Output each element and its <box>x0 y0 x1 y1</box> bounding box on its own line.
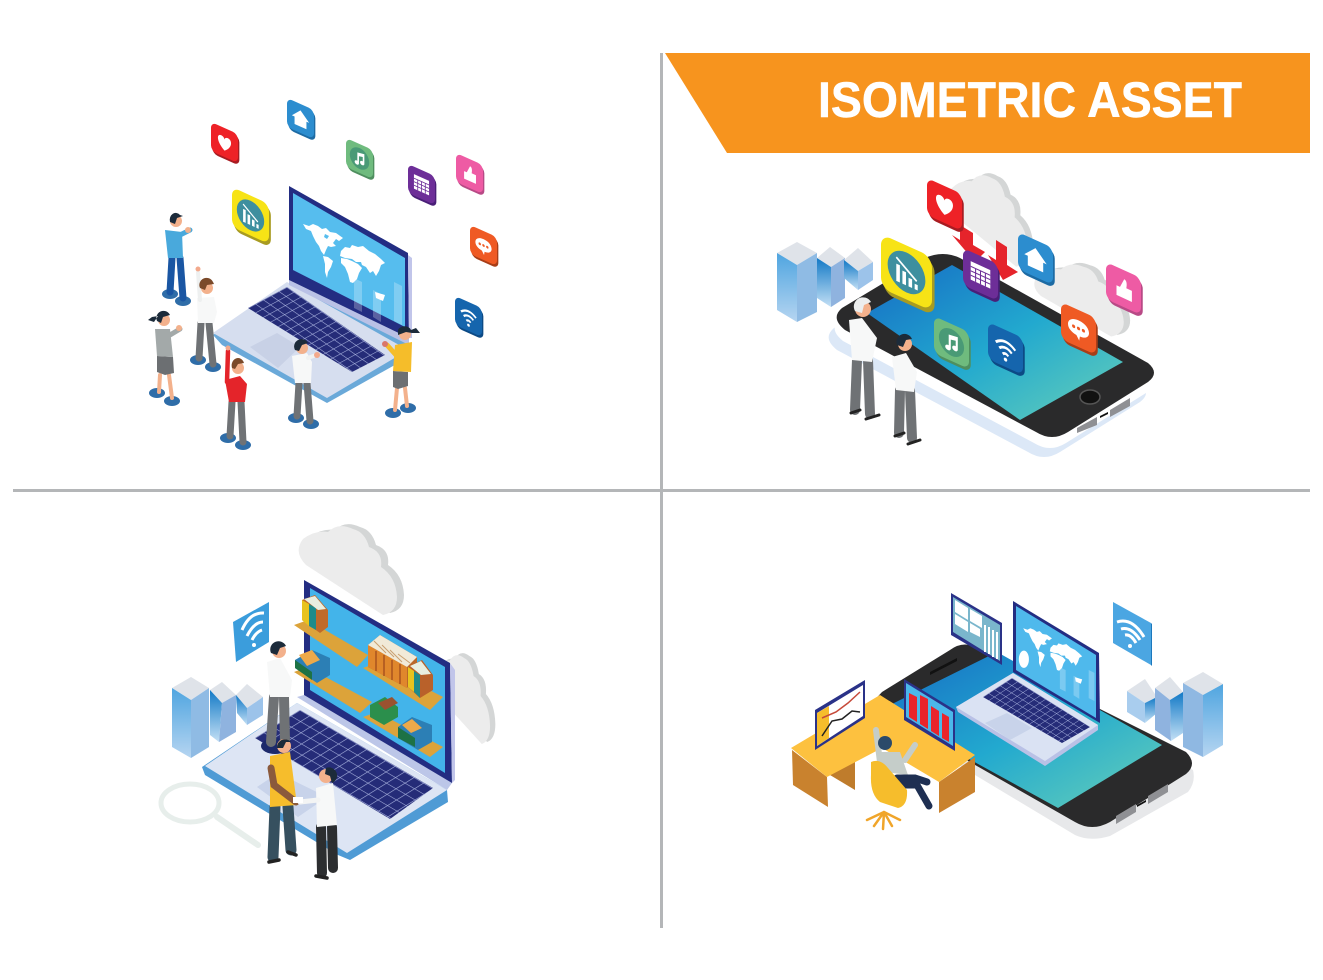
world map on screen <box>303 224 402 325</box>
icon: calendar <box>408 164 436 208</box>
red download arrows <box>952 225 1018 280</box>
cloud: right <box>1034 263 1130 337</box>
home button and speaker <box>1077 390 1130 433</box>
icon: chat <box>1061 302 1098 358</box>
panel: laptop with team and app icons <box>148 98 498 450</box>
icon: chart <box>881 234 935 316</box>
legs <box>897 778 929 806</box>
orange title banner <box>665 53 1310 153</box>
floating dashboard panel <box>951 593 1002 665</box>
horizontal divider <box>13 489 1310 492</box>
phone screen <box>867 265 1123 420</box>
blue column chart <box>1127 672 1223 757</box>
icon: home <box>287 98 315 142</box>
icon: wifi <box>988 322 1025 378</box>
cloud: behind screen right <box>432 653 495 744</box>
person: woman grey <box>148 311 182 406</box>
chair back <box>871 761 907 808</box>
icon: calendar <box>963 248 1000 304</box>
person: yellow shirt <box>269 739 297 862</box>
phone body <box>870 644 1192 827</box>
icon: music <box>346 138 374 182</box>
bookshelves <box>294 620 443 757</box>
arms raised <box>876 730 915 762</box>
person: white shirt on keyboard <box>261 641 292 754</box>
icon: heart <box>211 122 239 166</box>
blue column chart <box>777 242 873 322</box>
icon: like <box>456 153 484 197</box>
head <box>878 736 892 750</box>
person: white shirt handshake <box>293 767 337 878</box>
icon: music <box>934 316 971 372</box>
person: blue shirt <box>162 213 191 306</box>
icon: wifi tile <box>1113 602 1152 666</box>
world map on screen <box>1019 628 1094 701</box>
books <box>295 595 433 750</box>
phone screen <box>880 652 1162 808</box>
cloud: large <box>948 173 1033 267</box>
phone base <box>829 265 1152 457</box>
laptop <box>956 601 1100 766</box>
monitor: line chart <box>815 680 865 750</box>
panel: smartphone with floating apps <box>777 173 1154 457</box>
phone base <box>880 648 1194 839</box>
person: dark-haired man <box>892 334 920 444</box>
person: white shirt left <box>190 266 221 372</box>
icon: wifi tile <box>233 602 269 662</box>
person in office chair <box>867 730 929 829</box>
title: ISOMETRIC ASSET <box>818 72 1242 128</box>
laptop <box>202 580 455 860</box>
phone body <box>837 254 1154 437</box>
person: woman yellow <box>382 326 420 418</box>
blue column chart <box>172 677 263 758</box>
magnifying glass <box>161 784 258 845</box>
desk <box>791 695 975 813</box>
vertical divider <box>660 53 663 928</box>
icon: chart <box>232 187 271 248</box>
person: white-haired man <box>849 297 879 419</box>
icon: chat <box>470 225 498 269</box>
icon: wifi <box>455 296 483 340</box>
person: red shirt <box>220 346 251 450</box>
icon: home <box>1018 232 1055 288</box>
person: white shirt centre <box>288 339 320 429</box>
icon: heart pin <box>927 178 964 234</box>
laptop <box>213 186 412 403</box>
speaker and port <box>930 658 1168 824</box>
chair base <box>867 812 900 829</box>
cloud: behind screen top <box>299 524 404 615</box>
monitor: red bars <box>904 679 955 751</box>
panel: office desk on phone <box>791 593 1223 839</box>
panel: laptop bookshelf <box>161 524 495 878</box>
icon: like <box>1106 262 1143 318</box>
